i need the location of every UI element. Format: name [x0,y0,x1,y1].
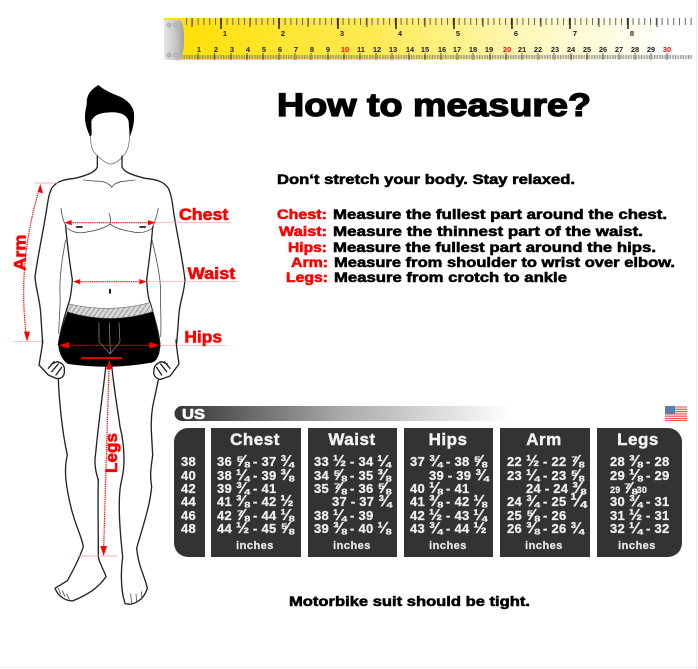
instructions block: Hips: [288,240,327,255]
legs column: Legs [617,430,659,449]
waist column: 38 ¼ - 39 [314,507,373,524]
label: arm: Arm [11,235,30,271]
instructions block: Measure the thinnest part of the waist. [333,224,643,239]
waist column [308,428,397,557]
arm column: inches [525,540,563,552]
size column: 38 [181,454,196,469]
label: hips: Hips [184,328,222,347]
waistband [67,303,153,318]
left leg [55,365,106,601]
US header bar: US [182,406,205,423]
size column: 46 [181,508,196,523]
instructions block: Measure the fullest part around the hips. [333,240,656,255]
nipples [77,224,145,229]
ruler centimetre numbers: 30 [663,45,671,54]
size column: 44 [181,494,196,509]
arm column: 25 ⅝ - 26 [507,507,566,524]
ruler centimetre numbers: 5 [262,45,266,54]
ruler inch numbers: 6 [514,29,518,38]
hips column: 42 ½ - 43 ¼ [410,507,488,524]
ruler centimetre numbers: 9 [326,45,330,54]
legs column: 28 ⅜ - 28 [610,453,669,470]
hips column: Hips [429,430,467,449]
right leg [112,365,158,604]
hips column: 37 ¾ - 38 ⅝ [410,453,488,470]
chest column: 42 ⅞ - 44 ⅛ [217,507,295,524]
hips measure [59,342,227,358]
chest column: 36 ⅝ - 37 ¾ [217,453,295,470]
arm column: 22 ½ - 22 ⅞ [507,453,585,470]
size column: 40 [181,468,196,483]
instructions block: Measure from crotch to ankle [334,270,568,285]
ruler centimetre numbers: 17 [453,45,461,54]
ruler centimetre numbers: 18 [469,45,477,54]
hips column: 39 - 39 ¾ [429,467,490,484]
chest column: Chest [230,430,280,449]
chest column: 38 ¼ - 39 ⅜ [217,467,295,484]
ruler centimetre numbers: 26 [599,45,607,54]
ruler centimetre numbers: 7 [294,45,298,54]
ruler centimetre numbers: 16 [438,45,446,54]
ruler centimetre numbers: 23 [551,45,559,54]
ruler centimetre numbers: 24 [567,45,576,54]
ruler centimetre numbers: 29 [647,45,655,54]
ruler inch numbers: 7 [573,29,577,38]
arm column: 26 ⅜ - 26 ¾ [507,520,585,537]
chest lines [68,180,154,233]
ruler centimetre numbers: 1 [197,45,201,54]
legs column: 31 ½ - 31 [610,507,669,524]
hair [85,85,134,137]
instructions block: Measure the fullest part around the chest. [333,207,667,222]
label: waist: Waist [188,264,236,283]
tape measure ruler [164,18,694,60]
chest measure [64,220,232,225]
US header bar [175,406,510,423]
chest column: 41 ⅜ - 42 ½ [217,493,294,510]
ruler centimetre numbers: 25 [583,45,591,54]
figure: upper body [11,85,238,367]
flag: United States [665,406,687,421]
waist column: 33 ½ - 34 ¼ [314,453,392,470]
ruler inch numbers: 1 [223,29,227,38]
ruler centimetre numbers: 14 [406,45,415,54]
waist column: 37 - 37 ¾ [332,493,393,510]
ruler centimetre numbers: 6 [278,45,282,54]
ruler metal end cap [164,20,184,60]
ruler centimetre numbers: 28 [631,45,639,54]
hips column [404,428,493,557]
arm measure [14,183,58,342]
waist column: 34 ⅝ - 35 ⅜ [314,467,392,484]
right hand [154,340,179,379]
ruler centimetre numbers: 19 [485,45,493,54]
ruler centimetre numbers: 13 [389,45,397,54]
title: How to measure? [277,87,591,123]
size column [174,428,205,557]
ruler centimetre numbers: 12 [373,45,381,54]
ruler centimetre numbers: 27 [615,45,623,54]
ruler centimetre numbers [197,45,671,54]
chest column: 44 ½ - 45 ⅝ [217,520,295,537]
instructions block: Legs: [286,270,328,285]
waist column: Waist [328,430,376,449]
ruler inch numbers: 2 [281,29,285,38]
ruler centimetre numbers: 10 [341,45,349,54]
figure: lower body [39,340,179,604]
arm column: Arm [526,430,562,449]
waist column: inches [333,540,371,552]
legs column: 29 ⅞30 [610,480,647,497]
waist measure [73,279,238,284]
hips column: 41 ⅜ - 42 ⅛ [410,493,488,510]
ruler inch numbers [223,29,634,38]
legs measure [77,358,122,556]
size column: 48 [181,521,196,536]
footer note: Motorbike suit should be tight. [289,594,530,609]
ruler centimetre numbers: 8 [310,45,314,54]
ruler centimetre numbers: 2 [214,45,218,54]
ruler inch numbers: 8 [630,29,634,38]
legs column: inches [618,540,656,552]
shorts [58,312,160,367]
arm column: 24 - 24 ⅜ [526,480,587,497]
ruler inch numbers: 5 [456,29,460,38]
face [90,136,130,164]
chest column [211,428,301,557]
hips column: inches [429,540,467,552]
ruler centimetre numbers: 11 [357,45,365,54]
navel [109,289,111,294]
body outline [35,156,97,343]
ruler centimetre numbers: 3 [230,45,234,54]
waist column: 35 ⅞ - 36 ⅝ [314,480,392,497]
ruler centimetre numbers: 22 [534,45,542,54]
instructions block: Measure from shoulder to wrist over elbow. [334,255,675,270]
legs column: 30 ¾ - 31 [610,493,669,510]
instructions block: Arm: [291,255,328,270]
legs column [597,428,682,557]
ruler centimetre numbers: 4 [246,45,251,54]
ruler centimetre numbers: 20 [503,45,511,54]
label: chest: Chest [179,205,229,224]
left hand [39,340,64,379]
hips column: 40 ⅛ - 41 [410,480,469,497]
arm column [500,428,590,557]
arm column: 23 ¼ - 23 ⅝ [507,467,585,484]
hips column: 43 ¾ - 44 ½ [410,520,487,537]
label: legs: Legs [102,433,121,473]
intro text: Don‘t stretch your body. Stay relaxed. [277,172,575,187]
legs column: 29 ⅛ - 29 [610,467,669,484]
chest column: inches [236,540,274,552]
fly [99,322,120,354]
arm column: 24 ¾ - 25 ¼ [507,490,588,511]
instructions block: Waist: [279,224,327,239]
instructions block: Chest: [277,207,327,222]
waist column: 39 ⅜ - 40 ⅛ [314,520,392,537]
ruler inch numbers: 4 [398,29,403,38]
ruler centimetre numbers: 21 [518,45,526,54]
ruler inch numbers: 3 [340,29,344,38]
ruler centimetre numbers: 15 [421,45,429,54]
chest column: 39 ¾ - 41 [217,480,276,497]
legs column: 32 ¼ - 32 [610,520,669,537]
size column: 42 [181,481,196,496]
instructions block [277,207,675,285]
